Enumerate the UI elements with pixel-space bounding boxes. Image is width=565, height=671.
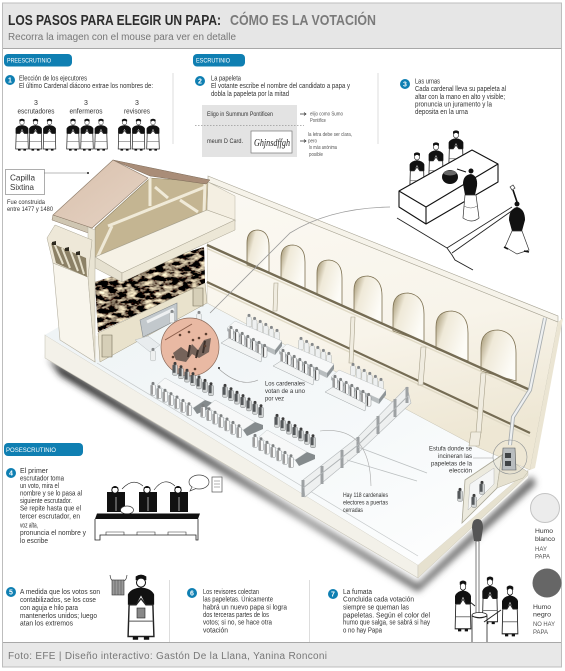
callout: estufa: papeletas de la: [431, 460, 472, 468]
ballot diagram: [195, 105, 352, 158]
chancel screen: [303, 387, 427, 497]
header band: [3, 4, 561, 48]
step 6 text: votación: [203, 628, 228, 634]
roof gable interior: [95, 178, 235, 258]
leader arc from chapel to urn: [210, 207, 390, 313]
altar wall: [98, 283, 207, 362]
step 4 text: siguiente escrutador.: [20, 498, 72, 505]
footer credit band: [3, 642, 561, 666]
callout: 118 cardenales: cerradas: [343, 507, 363, 514]
legend: black smoke: [532, 568, 562, 636]
callout: Capilla Sixtina: Sixtina: [10, 182, 34, 192]
front screen with figures: [458, 455, 528, 523]
step 5 text: atan los extremos: [20, 620, 73, 628]
urn: [442, 170, 458, 184]
step 7 text: [328, 589, 430, 634]
step 7 text: 7: [331, 592, 335, 598]
base shadow: [48, 358, 536, 592]
step 7 text: La fumata: [343, 589, 372, 596]
section tag: escrutinio: ESCRUTINIO: [196, 58, 230, 64]
section tag: escrutinio: [193, 54, 245, 66]
step 6 text: las papeletas. Únicamente: [203, 594, 273, 604]
step 1 text: El último Cardenal diácono extrae los nombres de:: [19, 83, 153, 90]
section tag: posescrutinio: [4, 443, 83, 456]
chapel illustration: [45, 160, 563, 592]
step 5 text: contabilizados, se los cose: [20, 597, 96, 604]
step 1 group labels: revisores: [124, 108, 150, 116]
smoke pipe: [510, 318, 545, 445]
step 2 text: 2: [198, 78, 202, 86]
callout: Capilla Sixtina: Capilla: [10, 172, 35, 182]
step 4 text: El primer: [20, 468, 49, 475]
step 5 text: con aguja e hilo para: [20, 605, 78, 612]
upper pews: [221, 314, 386, 411]
urn altar illustration: [397, 130, 529, 270]
legend: white smoke: Humo: [535, 528, 553, 535]
step 3 text: 3: [403, 82, 407, 88]
step 1 group labels: [18, 100, 150, 116]
step 1 group labels: 3: [84, 100, 88, 107]
step 5 text: 5: [9, 590, 13, 596]
title: LOS PASOS PARA ELEGIR UN PAPA:: [8, 12, 221, 29]
callout: estufa: [429, 446, 493, 474]
ballot diagram: lo más anónima: [309, 145, 337, 151]
legend: black smoke: NO HAY: [533, 621, 556, 628]
legend: black smoke: Humo: [533, 604, 551, 611]
step 5 illustration: bundled ballots and cardinal: [110, 575, 154, 640]
ballot diagram: elijo como Sumo: [310, 112, 343, 118]
section tag: preescrutinio: [4, 54, 72, 66]
step 6 text: votos; si no, se hace otra: [203, 620, 272, 626]
roof: [52, 160, 210, 234]
callout: Capilla Sixtina: [6, 170, 89, 213]
section tag: posescrutinio: POSESCRUTINIO: [6, 447, 56, 454]
front tower: [47, 225, 95, 362]
step 7 text: humo que salga, se sabrá si hay: [343, 620, 430, 626]
step 1 cardinals: [16, 119, 159, 151]
step 5 text: A medida que los votos son: [20, 589, 100, 596]
ballot diagram: pero: [308, 138, 317, 144]
step 3 text: deposita en la urna: [415, 109, 468, 116]
step 5 text: [6, 587, 100, 628]
step 3 text: [400, 78, 506, 116]
step 5 text: mantenerlos unidos; luego: [20, 613, 97, 620]
step 6 text: habrá un nuevo papa si logra: [203, 604, 287, 612]
step 6 text: [187, 588, 287, 634]
step 1 group labels: enfermeros: [70, 108, 103, 116]
step 2 text: dobla la papeleta por la mitad: [211, 91, 289, 98]
title: CÓMO ES LA VOTACIÓN: [230, 11, 376, 29]
step 2 text: [195, 76, 350, 98]
step 4 illustration: scrutineers table: [95, 475, 222, 540]
legend: white smoke: blanco: [535, 536, 555, 543]
title: [8, 11, 376, 29]
callout: votan de a uno: [218, 367, 305, 402]
callout: votan de a uno: por vez: [265, 396, 284, 402]
step 1 group labels: 3: [34, 100, 38, 107]
base slab: [45, 325, 528, 578]
ballot diagram: Eligo in Summum Pontificen: [207, 111, 273, 118]
step 4 text: lo escribe: [20, 538, 48, 545]
legend: black smoke: negro: [533, 612, 551, 618]
step 4 text: pronuncia el nombre y: [20, 530, 86, 537]
footer credit band: Foto: EFE | Diseño interactivo: Gastón De la Llana, Yanina Ronconi: [8, 651, 327, 662]
step 1 text: 1: [8, 78, 12, 84]
lower pews: [151, 362, 315, 468]
ballot diagram: Pontifice: [310, 118, 326, 124]
highlight circle: voting area: [161, 318, 219, 376]
fresco wall: [95, 247, 205, 332]
step 2 text: El votante escribe el nombre del candidato a papa y: [211, 83, 350, 90]
cardinals behind altar: [410, 130, 463, 192]
callout: estufa: elección: [449, 468, 472, 474]
callout: 118 cardenales: Hay 118 cardenales: [343, 492, 388, 499]
ballot diagram: Ghjnsdffgh: [254, 137, 290, 149]
legend: white smoke: HAY: [535, 546, 548, 553]
callout: 118 cardenales: electores a puertas: [343, 500, 388, 506]
step 1 text: Elección de los ejecutores: [19, 76, 87, 82]
step 6 text: dos terceras partes de los: [203, 612, 269, 619]
callout: 118 cardenales: [320, 430, 388, 514]
arched niches: [247, 230, 516, 381]
wall cornices: [207, 245, 530, 436]
step 3 text: pronuncia un juramento y la: [415, 102, 492, 108]
step 7 text: Concluida cada votación: [343, 596, 414, 604]
step 4 text: [6, 468, 86, 545]
callout: estufa: Estufa donde se: [429, 446, 472, 452]
step 6 text: Los revisores colectan: [203, 589, 259, 596]
legend: white smoke: PAPA: [535, 554, 551, 560]
step 7 illustration: chimney and cardinals: [455, 519, 518, 643]
legend: white smoke: [530, 494, 560, 560]
callout: votan de a uno: Los cardenales: [265, 380, 305, 388]
step 3 text: Las urnas: [415, 78, 440, 86]
step 1 group labels: 3: [135, 100, 139, 107]
step 4 text: escrutador toma: [20, 476, 64, 482]
legend: black smoke: PAPA: [533, 629, 549, 636]
pilasters: [273, 283, 486, 446]
ballot diagram: meum D Card.: [207, 138, 243, 145]
subtitle: Recorra la imagen con el mouse para ver en detalle: [8, 32, 236, 43]
callout: Capilla Sixtina: entre 1477 y 1480: [7, 207, 54, 213]
stove: [493, 440, 527, 474]
speech bubble and ballot: [189, 475, 222, 492]
step 7 text: siempre se queman las: [343, 604, 409, 612]
altar: [135, 303, 201, 361]
callout: votan de a uno: votan de a uno: [265, 388, 305, 395]
step 4 text: 4: [9, 470, 13, 478]
step 2 text: La papeleta: [211, 76, 241, 82]
step 1 group labels: escrutadores: [18, 108, 55, 116]
step 7 text: papeletas. Según el color del: [343, 612, 430, 620]
step 1 text: [5, 75, 153, 90]
step 6 text: 6: [190, 590, 194, 598]
platform: [397, 207, 513, 270]
section tag: preescrutinio: PREESCRUTINIO: [7, 58, 51, 64]
floor: [45, 303, 528, 565]
ballot diagram: la letra debe ser clara,: [308, 132, 352, 138]
altar block: [399, 150, 498, 224]
step 3 text: altar con la mano en alto y visible;: [415, 94, 505, 101]
callout: estufa: incineran las: [438, 453, 472, 460]
cardinal voting at urn: [457, 168, 479, 221]
step 3 text: Cada cardenal lleva su papeleta al: [415, 86, 506, 93]
step 7 text: o no hay Papa: [343, 628, 382, 634]
step 4 text: un voto, mira el: [20, 483, 59, 490]
right wall: [207, 182, 558, 470]
step 4 text: nombre y se lo pasa al: [20, 490, 82, 498]
step 4 text: voz alta,: [20, 522, 38, 530]
ballot diagram: posible: [309, 152, 323, 158]
callout: Capilla Sixtina: Fue construida: [7, 200, 46, 206]
step 4 text: tercer escrutador, en: [20, 514, 80, 520]
balcony cornice: [95, 210, 235, 282]
step 4 text: Se repite hasta que el: [20, 506, 81, 512]
cardinal holding ballot: [504, 185, 529, 254]
